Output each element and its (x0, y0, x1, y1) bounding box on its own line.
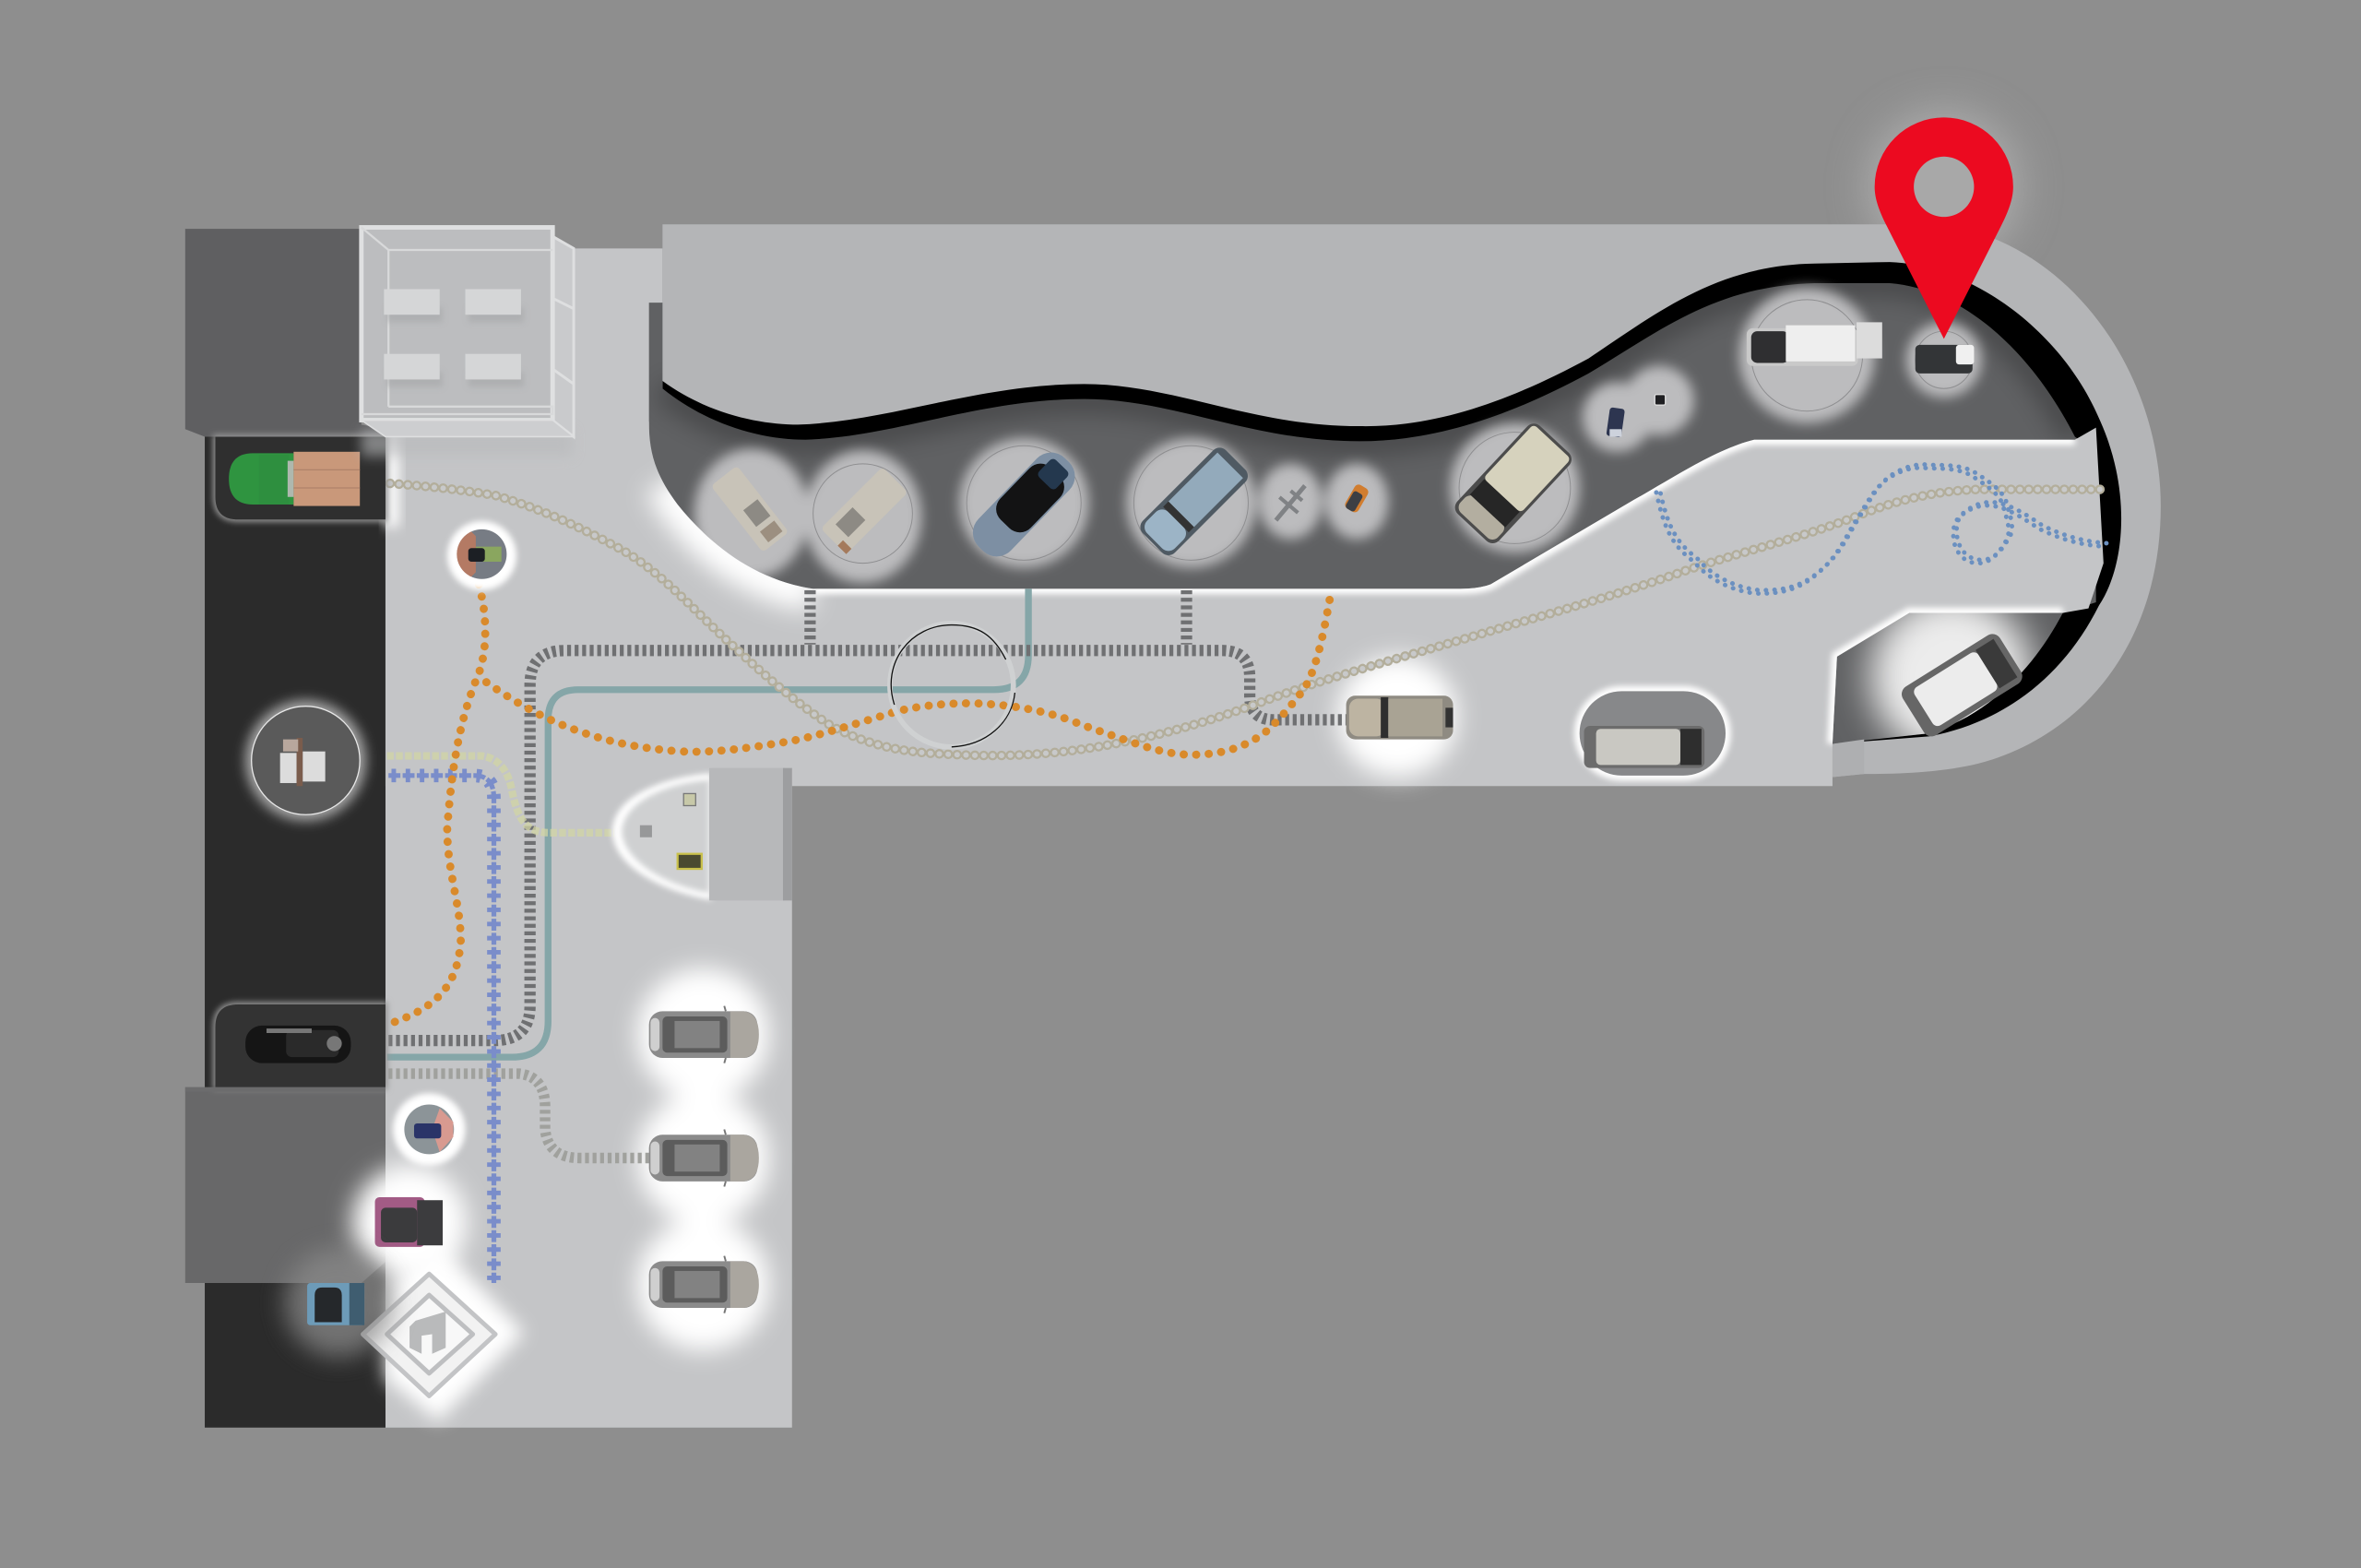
floor plan map (184, 101, 2161, 1430)
vehicle: blue cab (285, 1248, 393, 1357)
dark exhibition zone (649, 283, 2096, 744)
lower floor and strip (386, 422, 2104, 786)
benches (384, 289, 521, 379)
capsule alcove (1576, 688, 1728, 778)
route: beige rings (390, 483, 2105, 755)
location pin (1875, 117, 2013, 339)
vehicle: purple cab (375, 1197, 443, 1247)
dark zone inner shadow (662, 283, 2075, 441)
vehicle: white truck (1747, 322, 1882, 366)
lower-left floor glow (386, 436, 399, 527)
route: yellow (387, 756, 614, 833)
vehicle: small orange car (1344, 483, 1370, 514)
vehicle: SUV (1347, 695, 1453, 740)
alcove: green truck (215, 436, 386, 519)
route: teal (387, 588, 1028, 1057)
vehicle: black car (245, 1026, 350, 1063)
kiosk: top circle (447, 521, 516, 590)
route: fine blue dots (1656, 465, 2108, 593)
route: blue crosses (388, 776, 494, 1283)
vehicle: navy scooter (1606, 407, 1625, 437)
route: light ticks (388, 1074, 650, 1158)
alcove: black car (215, 1004, 386, 1087)
glass room (362, 228, 574, 457)
vehicle: black sports car (965, 445, 1083, 564)
pin halo (1866, 109, 2023, 265)
vehicle: white van in pocket (1898, 631, 2025, 740)
dark corridor (205, 429, 386, 1428)
vehicle: green truck (229, 452, 360, 506)
main floor (386, 248, 792, 1428)
edge glow (666, 440, 2075, 744)
pedestal: engine display (245, 700, 366, 821)
pocket light (1870, 595, 2033, 757)
top-left block (185, 229, 386, 436)
glow: vertical cars (637, 968, 769, 1350)
pedestal rings (813, 300, 1973, 564)
vehicle: capsule van (1584, 726, 1704, 768)
vehicle: small black item (1655, 395, 1666, 405)
booth box (709, 768, 792, 900)
vehicle: grey car 2 (649, 1129, 759, 1187)
kiosk: lower circle (393, 1093, 465, 1166)
bottom-left block (185, 1087, 386, 1283)
outer curved wall (662, 224, 2161, 777)
glow: diamond logo (386, 1244, 524, 1421)
vehicle: camper 2 (821, 467, 908, 554)
route: orange (388, 584, 1331, 1024)
glow: purple vehicle (352, 1166, 467, 1280)
bottom-left block front (185, 1087, 386, 1092)
route: grey ticks (388, 590, 1350, 1040)
dome booth (614, 768, 792, 900)
pedestal halos (694, 288, 1982, 583)
black shadow band (662, 262, 2121, 744)
vehicle: grey car 1 (649, 1006, 759, 1063)
logo diamond (362, 1274, 495, 1396)
vehicle: dark cab (1916, 345, 1974, 374)
vehicle: blue SUV (1136, 444, 1252, 559)
vehicle: camper 1 (711, 466, 789, 552)
wall step (1833, 740, 1864, 777)
ring portal (890, 624, 1014, 747)
vehicle: beige van (1452, 420, 1575, 547)
bench shadows (387, 307, 524, 387)
vehicle: grey car 3 (649, 1256, 759, 1313)
glow: SUV (1337, 657, 1457, 777)
vehicle: small grey drone (1266, 478, 1314, 528)
